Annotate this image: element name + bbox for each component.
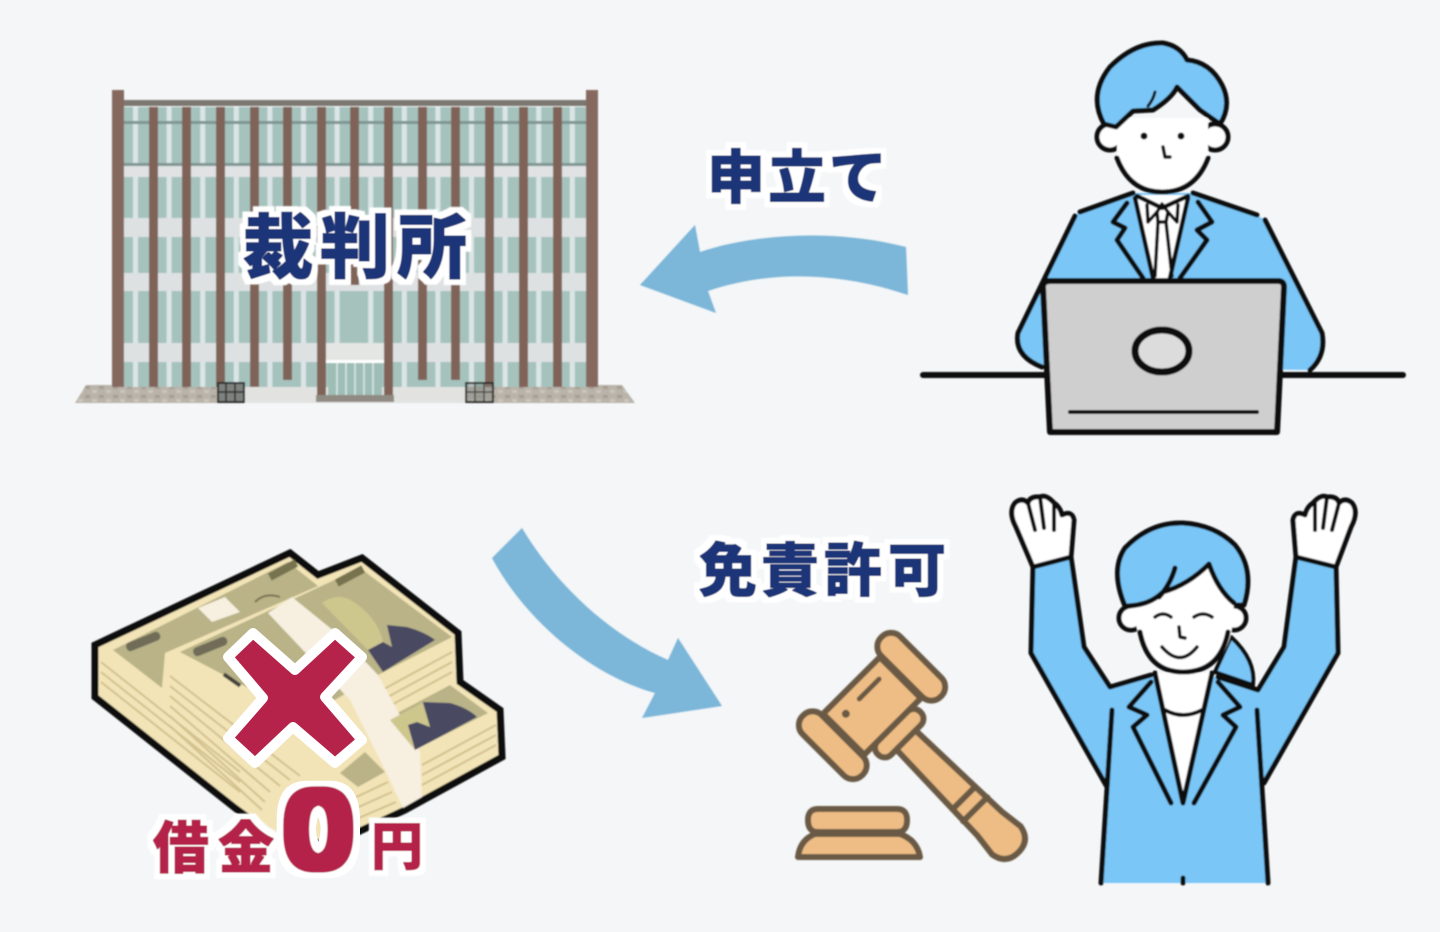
illustration: court building	[75, 90, 635, 403]
base	[808, 809, 907, 832]
hair	[1097, 43, 1227, 127]
label: zero debt: 金	[218, 817, 274, 880]
label: petition: 申	[707, 146, 765, 211]
right hand	[1293, 496, 1355, 567]
arrow: discharge granted	[492, 528, 722, 718]
label: discharge approved: 免	[699, 539, 757, 604]
ground	[75, 385, 635, 403]
laptop	[1043, 281, 1284, 432]
arrow: petition to court	[640, 225, 908, 313]
illustration: woman cheering	[1012, 496, 1355, 883]
label: zero debt: 借	[153, 817, 209, 880]
lapels	[1129, 673, 1240, 803]
gates	[218, 383, 244, 402]
smiling face details	[1155, 614, 1212, 658]
desk	[923, 372, 1403, 378]
head	[823, 657, 921, 755]
hair	[1118, 523, 1248, 606]
label: court: 裁	[243, 209, 313, 287]
label: petition: て	[829, 146, 887, 211]
ponytail	[1215, 637, 1253, 685]
label: court: 所	[397, 209, 467, 287]
lapels	[1113, 202, 1212, 278]
face	[1097, 124, 1123, 150]
outline body	[95, 553, 502, 845]
handle	[879, 713, 1033, 867]
caps	[872, 628, 950, 706]
portraits	[322, 597, 383, 650]
icon: red cross	[228, 633, 362, 763]
illustration: cash stacks	[95, 553, 502, 845]
label: zero debt: 円	[371, 819, 423, 877]
blouse	[1155, 673, 1214, 803]
neck cap	[871, 705, 927, 761]
top bills	[113, 562, 318, 688]
suit	[1018, 193, 1323, 370]
label: discharge approved: 可	[888, 539, 946, 604]
label: zero debt	[153, 767, 423, 892]
paper band	[198, 597, 240, 622]
eyes and nose	[1140, 132, 1148, 140]
illustration: gavel	[794, 628, 1067, 901]
illustration: man at laptop	[923, 43, 1403, 432]
label: court: 判	[320, 209, 390, 287]
ears and face	[1119, 606, 1143, 630]
label: discharge approved: 許	[824, 539, 882, 604]
entrance	[326, 343, 384, 360]
small bill labels	[125, 631, 162, 652]
label: discharge approved: 責	[761, 539, 819, 604]
label: petition: 立	[768, 146, 826, 211]
label: zero debt: 0	[282, 767, 355, 892]
bill edges	[101, 652, 496, 820]
shirt and tie	[1137, 195, 1188, 278]
left hand	[1012, 496, 1074, 567]
jacket	[1031, 557, 1338, 883]
